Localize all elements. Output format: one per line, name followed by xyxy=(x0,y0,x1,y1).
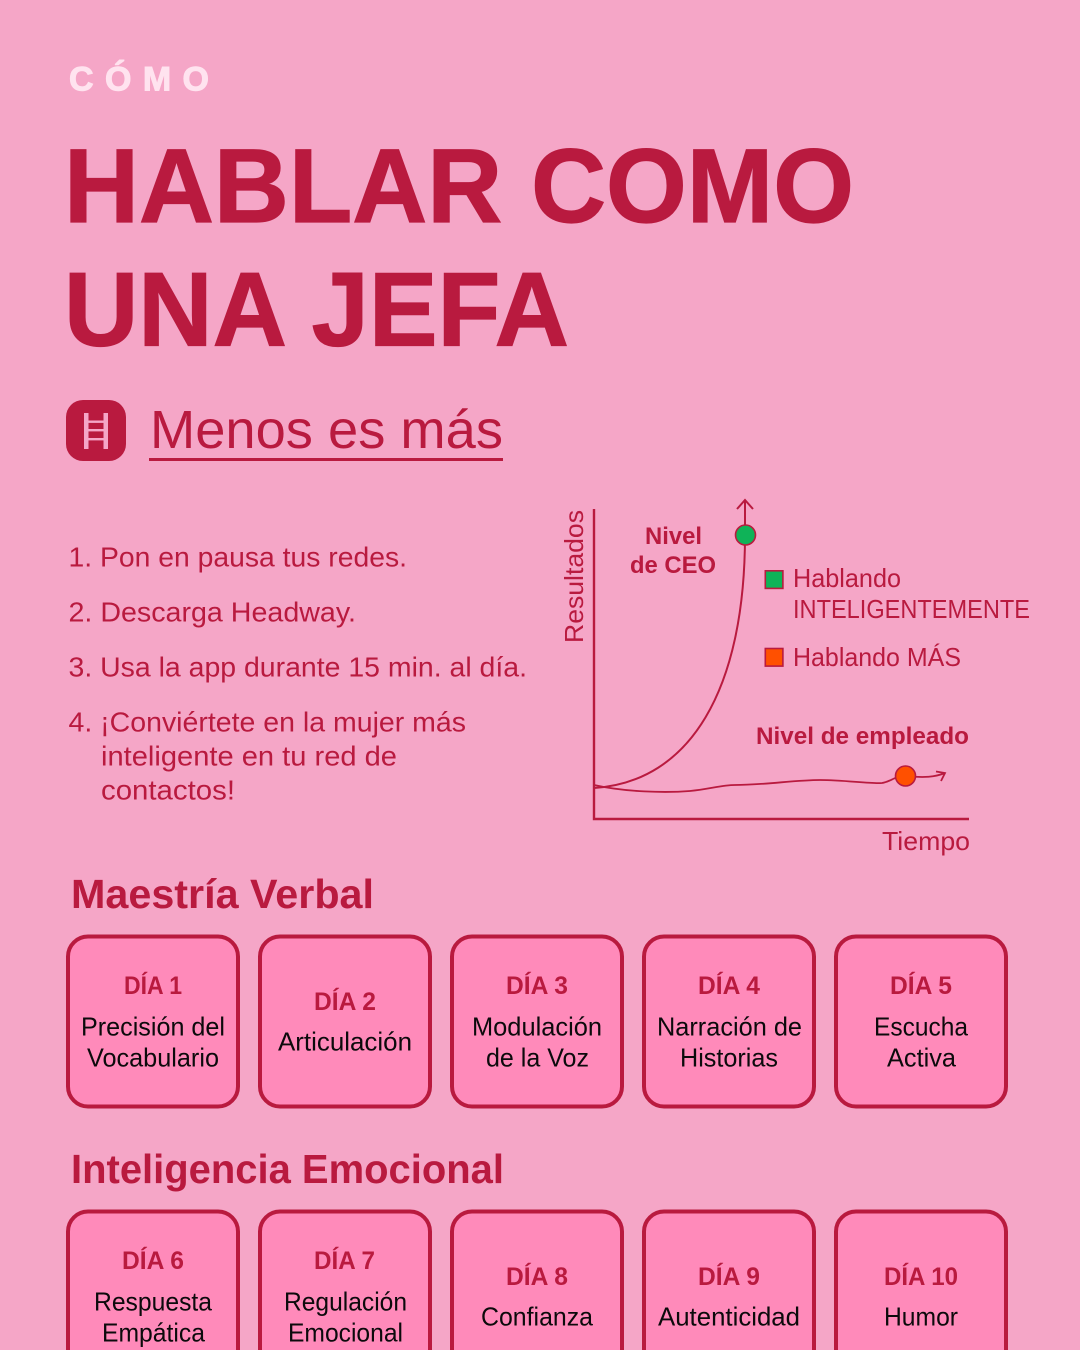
card: día 7: DÍA 7 xyxy=(314,1246,375,1275)
card: día 7: Regulación xyxy=(284,1286,407,1316)
numbered list: inteligente en tu red de xyxy=(101,740,397,772)
card: día 5 xyxy=(836,936,1006,1106)
card: día 3: DÍA 3 xyxy=(506,971,568,1000)
card: día 8 xyxy=(452,1212,622,1350)
heading: Maestría Verbal: Maestría Verbal xyxy=(71,871,374,917)
employee curve xyxy=(594,772,945,792)
numbered list: 4. ¡Conviértete en la mujer más xyxy=(68,706,466,738)
card: día 2: DÍA 2 xyxy=(314,987,376,1016)
subtitle: Menos es más: Menos es más xyxy=(150,400,503,460)
card: día 9: Autenticidad xyxy=(658,1302,800,1332)
title: HABLAR COMO xyxy=(64,128,854,245)
orange marker xyxy=(896,766,916,786)
numbered list: 3. Usa la app durante 15 min. al día. xyxy=(68,652,527,682)
card: día 3: Modulación xyxy=(472,1012,602,1042)
card: día 3 xyxy=(452,936,622,1106)
card: día 5: DÍA 5 xyxy=(890,971,952,1000)
numbered list: 1. Pon en pausa tus redes. xyxy=(68,542,407,572)
legend: green: INTELIGENTEMENTE xyxy=(793,594,1030,624)
legend: orange: Hablando MÁS xyxy=(793,642,961,672)
label: Nivel de CEO: Nivel xyxy=(645,523,702,550)
line chart: results over time xyxy=(559,500,1030,856)
card: día 1: DÍA 1 xyxy=(124,971,182,1000)
card: día 7 xyxy=(260,1212,430,1350)
green marker xyxy=(736,525,756,545)
legend: green xyxy=(765,563,1030,624)
card: día 8: Confianza xyxy=(481,1302,594,1332)
title xyxy=(64,128,854,368)
label: Nivel de CEO xyxy=(630,523,716,579)
eyebrow: CÓMO: CÓMO xyxy=(69,60,209,98)
card: día 9: DÍA 9 xyxy=(698,1262,760,1291)
card: día 6: Respuesta xyxy=(94,1286,213,1316)
card: día 5: Escucha xyxy=(874,1012,968,1042)
card: día 1: Precisión del xyxy=(81,1012,225,1042)
card: día 10: Humor xyxy=(884,1302,958,1332)
card: día 3: de la Voz xyxy=(486,1042,589,1072)
card: día 10: DÍA 10 xyxy=(884,1262,958,1291)
card: día 8: DÍA 8 xyxy=(506,1262,568,1291)
icon: ladder xyxy=(66,400,126,461)
x axis label: Tiempo xyxy=(882,826,970,856)
card: día 1: Vocabulario xyxy=(87,1042,219,1072)
label: Nivel de CEO: de CEO xyxy=(630,552,716,579)
chart axes xyxy=(594,509,969,819)
card: día 4: Historias xyxy=(680,1042,778,1072)
card: día 10 xyxy=(836,1212,1006,1350)
heading: Inteligencia Emocional: Inteligencia Emocional xyxy=(71,1146,504,1192)
card: día 9 xyxy=(644,1212,814,1350)
numbered list: 2. Descarga Headway. xyxy=(68,596,356,628)
card: día 1 xyxy=(68,936,238,1106)
CEO curve xyxy=(594,500,753,788)
card: día 4: DÍA 4 xyxy=(698,971,760,1000)
numbered list: contactos! xyxy=(101,774,235,806)
y axis label: Resultados xyxy=(559,510,589,643)
card: día 6 xyxy=(68,1212,238,1350)
card: día 6: DÍA 6 xyxy=(122,1246,184,1275)
card: día 4: Narración de xyxy=(657,1012,802,1042)
card: día 5: Activa xyxy=(887,1042,957,1072)
card: día 2 xyxy=(260,936,430,1106)
numbered list xyxy=(68,542,527,806)
card: día 7: Emocional xyxy=(288,1318,403,1348)
legend: green: Hablando xyxy=(793,563,901,593)
title: UNA JEFA xyxy=(64,252,569,368)
card: día 4 xyxy=(644,936,814,1106)
card: día 2: Articulación xyxy=(278,1026,412,1056)
card: día 6: Empática xyxy=(102,1318,206,1348)
label: Nivel de empleado: Nivel de empleado xyxy=(756,723,969,750)
